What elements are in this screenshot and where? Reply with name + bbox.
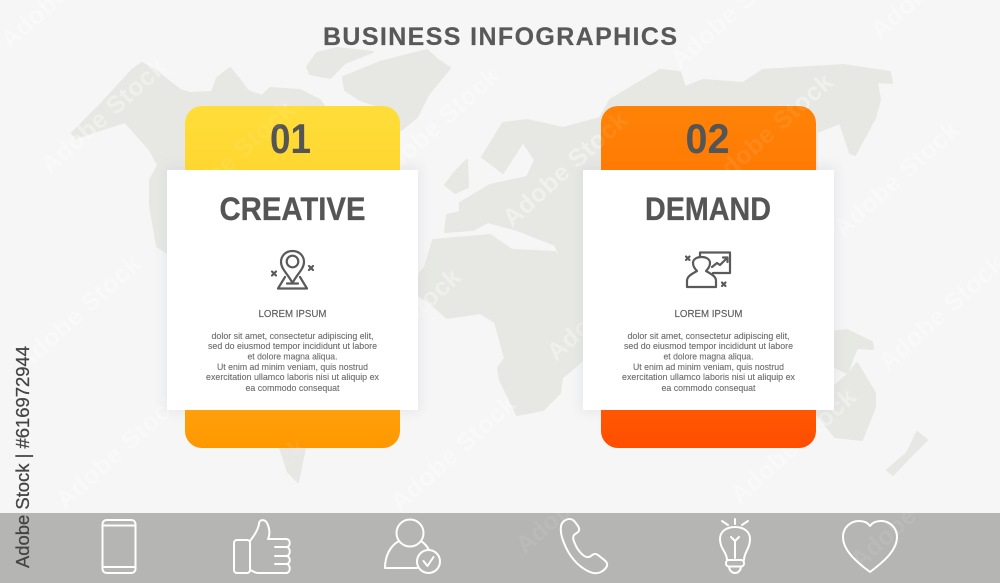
bottom icon bar (0, 513, 1000, 583)
body text: demand: ea commodo consequat (662, 383, 756, 393)
white sheet: demand (583, 170, 834, 410)
body text: demand: Ut enim ad minim veniam, quis nostrud (633, 362, 784, 372)
icon: map pin (272, 251, 313, 288)
watermark pattern: Adobe Stock (330, 263, 467, 389)
icon: thumbs up (234, 520, 290, 573)
body text: demand: et dolore magna aliqua. (664, 352, 754, 362)
watermark over cards: Adobe Stock (497, 106, 634, 232)
watermark over cards: Adobe Stock (702, 68, 839, 194)
white sheet: creative (167, 170, 418, 410)
watermark pattern: Adobe Stock (368, 62, 505, 188)
number 02: 02 (686, 115, 730, 162)
body text: creative (206, 331, 380, 393)
watermark pattern: Adobe Stock (163, 96, 300, 222)
watermark pattern: Adobe Stock (385, 390, 522, 516)
body text: creative: sed do eiusmod tempor incididunt ut labore (208, 341, 377, 351)
sheet shadow: creative (165, 166, 420, 412)
icon: heart (843, 521, 897, 572)
coloured card: demand (601, 106, 816, 448)
watermark over cards (163, 68, 839, 559)
body text: creative: exercitation ullamco laboris nisi ut aliquip ex (206, 372, 380, 382)
subheading: creative: LOREM IPSUM (258, 308, 326, 320)
sheet shadow: demand (581, 166, 836, 412)
body text: creative: dolor sit amet, consectetur adipiscing elit, (212, 331, 374, 341)
watermark over bar: Adobe (510, 487, 587, 559)
watermark pattern: Adobe Stock (702, 68, 839, 194)
heading: demand: DEMAND (645, 191, 771, 227)
watermark pattern: Adobe Stock (497, 106, 634, 232)
panel: demand (581, 106, 836, 448)
watermark pattern: Adobe Stock (35, 53, 172, 179)
body text: creative: ea commodo consequat (246, 383, 340, 393)
panel: creative (165, 106, 420, 448)
body text: creative: Ut enim ad minim veniam, quis nostrud (217, 362, 368, 372)
watermark over bar (510, 487, 922, 574)
icon: user with check (385, 520, 440, 573)
subheading: demand: LOREM IPSUM (674, 308, 742, 320)
watermark pattern: Adobe Stock (541, 240, 678, 366)
watermark over bar: Adobe (845, 502, 922, 574)
watermark pattern: Adobe Stock (10, 250, 147, 376)
heading: creative: CREATIVE (220, 191, 366, 227)
world map (72, 48, 927, 482)
body text: demand: sed do eiusmod tempor incididunt ut labore (624, 341, 793, 351)
watermark over cards: Adobe Stock (175, 433, 312, 559)
coloured card: creative (185, 106, 400, 448)
watermark pattern: Adobe Stock (828, 116, 965, 242)
icon: light bulb (720, 519, 750, 573)
icon: telephone (561, 519, 607, 573)
title: BUSINESS INFOGRAPHICS (323, 23, 677, 51)
icon: person with chart board (686, 252, 730, 287)
number 01: 01 (270, 115, 311, 162)
body text: demand: exercitation ullamco laboris nisi ut aliquip ex (622, 372, 796, 382)
watermark over cards: Adobe Stock (163, 96, 300, 222)
watermark pattern: Adobe Stock (50, 388, 187, 514)
watermark pattern: Adobe Stock (725, 383, 862, 509)
body text: creative: et dolore magna aliqua. (248, 352, 338, 362)
body text: demand: dolor sit amet, consectetur adipiscing elit, (628, 331, 790, 341)
icon: smartphone (102, 520, 136, 573)
body text: demand (622, 331, 796, 393)
stock id caption: Adobe Stock | #616972944 (12, 346, 33, 568)
